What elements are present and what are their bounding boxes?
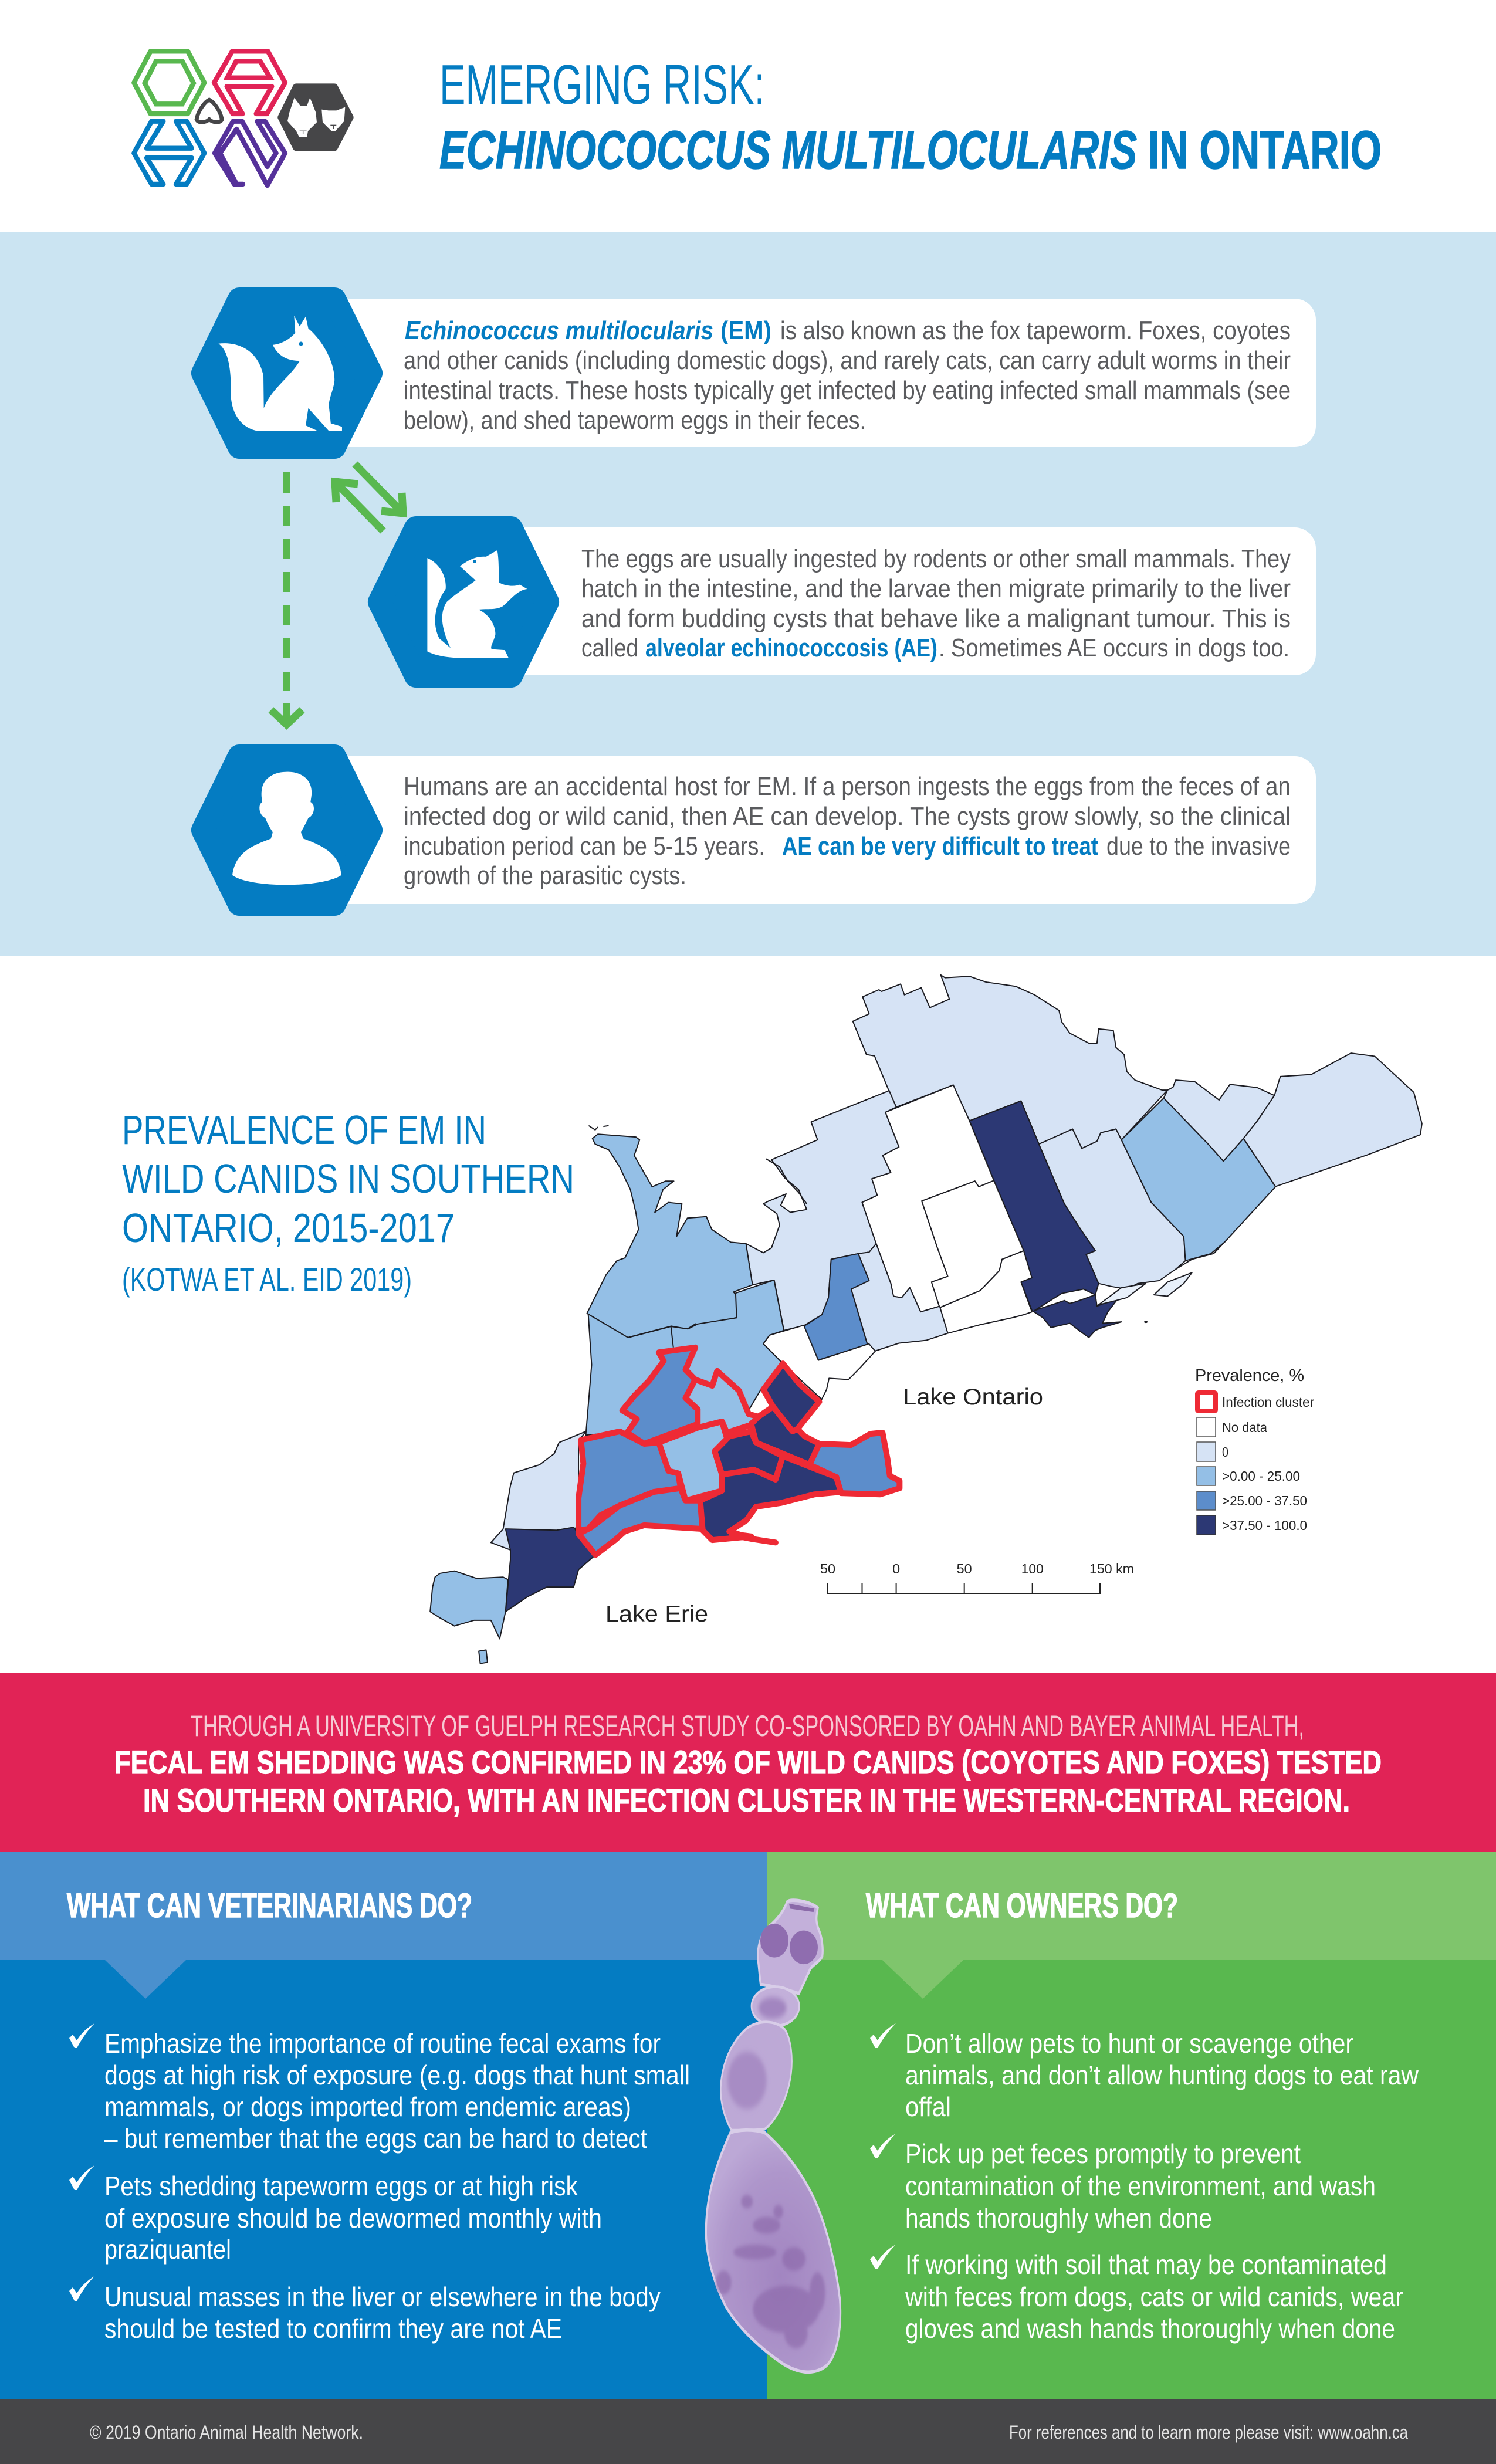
card: canid text box: Echinococcus multilocularis: [405, 316, 713, 345]
arrow: rodent to canid: [335, 482, 383, 531]
map: infection cluster: [578, 1348, 899, 1555]
card: rodent text box: [463, 527, 1316, 675]
footer: © 2019 Ontario Animal Health Network.: [90, 2422, 363, 2443]
card: human text box: AE can be very difficult to treat: [782, 832, 1098, 861]
illustration: tapeworm: [706, 1900, 840, 2372]
panel: veterinarians: [0, 1852, 767, 2399]
scale bar: [820, 1561, 1134, 1593]
heading: owners: WHAT CAN OWNERS DO?: [866, 1887, 1178, 1925]
list: owner actions: hands thoroughly when done: [905, 2203, 1212, 2233]
scale bar: 100: [1021, 1561, 1044, 1576]
scale bar: 50: [820, 1561, 835, 1576]
title: [439, 53, 1382, 180]
scale bar: 0: [892, 1561, 900, 1576]
map: southern counties: [430, 1280, 875, 1664]
heading: veterinarians: WHAT CAN VETERINARIANS DO?: [67, 1887, 472, 1925]
heading: prevalence map: PREVALENCE OF EM IN: [122, 1107, 486, 1153]
map: northern counties: [587, 975, 1422, 1360]
legend: [1195, 1366, 1314, 1535]
heading: prevalence map: (KOTWA ET AL. EID 2019): [122, 1261, 412, 1298]
card: human text box: Humans are an accidental host for EM. If a person ingests the eggs from the feces of an: [404, 772, 1291, 801]
arrow: dashed canid to human: [271, 472, 302, 725]
card: human text box: growth of the parasitic cysts.: [404, 861, 686, 890]
list: veterinarian actions: Unusual masses in the liver or elsewhere in the body: [104, 2282, 661, 2312]
list: veterinarian actions: – but remember that the eggs can be hard to detect: [104, 2123, 647, 2154]
list: veterinarian actions: should be tested to confirm they are not AE: [104, 2313, 562, 2344]
icon: human hexagon: [203, 756, 371, 904]
heading: prevalence map: ONTARIO, 2015-2017: [122, 1205, 455, 1251]
list: owner actions: [870, 2023, 1419, 2344]
list: veterinarian actions: [69, 2023, 690, 2344]
list: veterinarian actions: of exposure should be dewormed monthly with: [104, 2203, 602, 2233]
list: owner actions: with feces from dogs, cats or wild canids, wear: [905, 2282, 1403, 2312]
card: rodent text box: hatch in the intestine, and the larvae then migrate primarily to the liver: [581, 574, 1291, 603]
list: veterinarian actions: praziquantel: [104, 2234, 231, 2265]
list: owner actions: offal: [905, 2091, 951, 2122]
title: ECHINOCOCCUS MULTILOCULARIS: [439, 120, 1137, 180]
header strip: veterinarians: [0, 1852, 767, 1999]
list: owner actions: animals, and don’t allow hunting dogs to eat raw: [905, 2060, 1419, 2090]
legend: >37.50 - 100.0: [1222, 1518, 1307, 1533]
card: human text box: [287, 756, 1316, 904]
heading: prevalence map: WILD CANIDS IN SOUTHERN: [122, 1156, 574, 1201]
card: human text box: incubation period can be 5-15 years.: [404, 832, 765, 861]
card: canid text box: (EM): [720, 316, 771, 345]
logo: OAHN hexagons: [134, 51, 350, 185]
legend: No data: [1222, 1420, 1267, 1435]
card: rodent text box: called: [581, 634, 638, 662]
icon: fox hexagon: [203, 299, 371, 447]
scale bar: 150 km: [1089, 1561, 1134, 1576]
card: human text box: infected dog or wild canid, then AE can develop. The cysts grow slowly, so the clinical: [404, 802, 1291, 831]
legend: >25.00 - 37.50: [1222, 1493, 1307, 1508]
card: rodent text box: alveolar echinococcosis (AE): [645, 634, 937, 662]
list: owner actions: Pick up pet feces promptly to prevent: [905, 2138, 1301, 2169]
legend: >0.00 - 25.00: [1222, 1468, 1300, 1484]
icon: squirrel hexagon: [380, 528, 547, 676]
legend: Prevalence, %: [1195, 1366, 1304, 1385]
legend: 0: [1222, 1444, 1228, 1460]
panel: life cycle: [0, 232, 1496, 956]
list: owner actions: Don’t allow pets to hunt or scavenge other: [905, 2028, 1353, 2059]
list: veterinarian actions: mammals, or dogs imported from endemic areas): [104, 2091, 631, 2122]
footer: [0, 2399, 1496, 2464]
banner: key finding: [0, 1673, 1496, 1852]
card: rodent text box: . Sometimes AE occurs in dogs too.: [939, 634, 1289, 662]
card: rodent text box: and form budding cysts that behave like a malignant tumour. This is: [581, 604, 1291, 633]
list: veterinarian actions: Emphasize the importance of routine fecal exams for: [104, 2028, 661, 2059]
heading: prevalence map: [122, 1107, 574, 1298]
footer: For references and to learn more please visit: www.oahn.ca: [1009, 2422, 1408, 2443]
card: canid text box: [287, 299, 1316, 447]
panel: owners: [767, 1852, 1496, 2399]
card: canid text box: and other canids (including domestic dogs), and rarely cats, can carry adult worms in their: [404, 346, 1291, 375]
card: human text box: due to the invasive: [1106, 832, 1291, 861]
legend: Infection cluster: [1222, 1395, 1314, 1410]
list: owner actions: gloves and wash hands thoroughly when done: [905, 2313, 1395, 2344]
map: southern Ontario prevalence: [430, 975, 1422, 1664]
title: IN ONTARIO: [1148, 120, 1382, 180]
header strip: owners: [767, 1852, 1496, 1999]
list: owner actions: If working with soil that may be contaminated: [905, 2249, 1387, 2280]
title: EMERGING RISK:: [439, 53, 765, 116]
card: canid text box: intestinal tracts. These hosts typically get infected by eating infected small mammals (see: [404, 376, 1291, 405]
card: canid text box: is also known as the fox tapeworm. Foxes, coyotes: [780, 316, 1291, 345]
list: owner actions: contamination of the environment, and wash: [905, 2171, 1376, 2201]
label: Lake Erie: Lake Erie: [605, 1602, 708, 1627]
card: rodent text box: The eggs are usually ingested by rodents or other small mammals. They: [581, 544, 1291, 573]
card: canid text box: below), and shed tapeworm eggs in their feces.: [404, 406, 866, 435]
scale bar: 50: [957, 1561, 972, 1576]
arrow: canid to rodent: [355, 464, 403, 513]
label: Lake Ontario: Lake Ontario: [903, 1385, 1043, 1410]
list: veterinarian actions: Pets shedding tapeworm eggs or at high risk: [104, 2171, 578, 2201]
list: veterinarian actions: dogs at high risk of exposure (e.g. dogs that hunt small: [104, 2060, 690, 2090]
